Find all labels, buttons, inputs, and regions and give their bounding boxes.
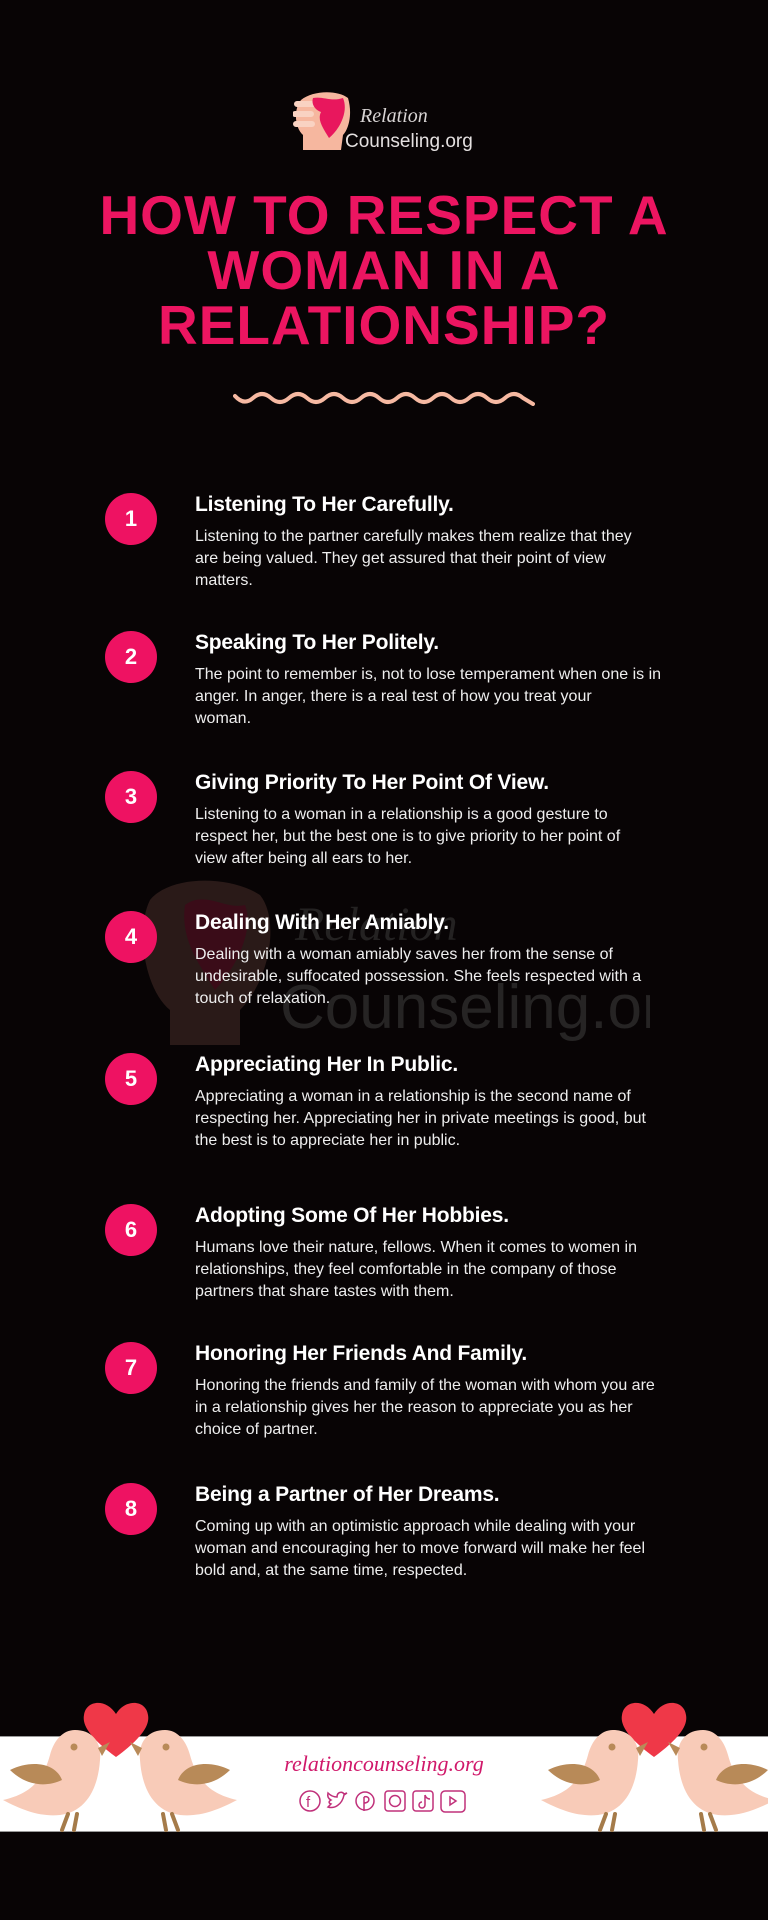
item 8: 8: [125, 1496, 137, 1521]
item 6: Humans love their nature, fellows. When it comes to women in: [195, 1239, 637, 1256]
logo: Relation: [359, 105, 428, 127]
item 8: [105, 1483, 645, 1579]
item 7: in a relationship gives her the reason to appreciate you as her: [195, 1399, 633, 1416]
item 2: Speaking To Her Politely.: [195, 631, 439, 654]
social icons: [299, 1790, 466, 1813]
item 4: [105, 911, 642, 1007]
item 3: 3: [125, 784, 137, 809]
watermark: faded logo: [145, 880, 650, 1045]
footer birds right: [541, 1702, 768, 1832]
item 5: Appreciating a woman in a relationship is the second name of: [195, 1088, 631, 1105]
item 7: Honoring the friends and family of the woman with whom you are: [195, 1377, 655, 1394]
item 8: Coming up with an optimistic approach while dealing with your: [195, 1518, 635, 1535]
item 3: [105, 771, 620, 867]
icon: fist with heart: [295, 92, 350, 150]
title: HOW TO RESPECT A: [99, 184, 669, 246]
title: [99, 184, 669, 356]
item 1: 1: [125, 506, 137, 531]
item 8: Being a Partner of Her Dreams.: [195, 1483, 499, 1506]
item 2: woman.: [195, 710, 251, 727]
item 7: [105, 1342, 655, 1438]
item 4: Dealing With Her Amiably.: [195, 911, 449, 934]
item 3: Listening to a woman in a relationship is a good gesture to: [195, 806, 608, 823]
item 1: matters.: [195, 572, 253, 589]
item 4: Dealing with a woman amiably saves her from the sense of: [195, 946, 613, 963]
item 5: [105, 1053, 646, 1149]
logo: Counseling.org: [345, 131, 473, 152]
item 3: Giving Priority To Her Point Of View.: [195, 771, 549, 794]
item 7: Honoring Her Friends And Family.: [195, 1342, 527, 1365]
footer url: relationcounseling.org: [284, 1751, 484, 1776]
item 1: Listening to the partner carefully makes them realize that they: [195, 528, 632, 545]
item 3: respect her, but the best one is to give priority to her point of: [195, 828, 620, 845]
item 6: 6: [125, 1217, 137, 1242]
item 4: 4: [125, 924, 137, 949]
footer birds left: [3, 1702, 237, 1832]
item 5: the best is to appreciate her in public.: [195, 1132, 460, 1149]
item 8: bold and, at the same time, respected.: [195, 1562, 467, 1579]
item 1: Listening To Her Carefully.: [195, 493, 454, 516]
squiggle divider: [233, 392, 535, 406]
item 4: undesirable, suffocated possession. She feels respected with a: [195, 968, 641, 985]
item 2: anger. In anger, there is a real test of how you treat your: [195, 688, 592, 705]
item 1: [105, 493, 632, 589]
item 8: woman and encouraging her to move forward will make her feel: [195, 1540, 645, 1557]
item 2: The point to remember is, not to lose temperament when one is in: [195, 666, 661, 683]
item 1: are being valued. They get assured that their point of view: [195, 550, 606, 567]
watermark: faded logo: Relation: [294, 898, 458, 951]
footer band: [0, 1736, 768, 1832]
item 7: 7: [125, 1355, 137, 1380]
item 5: respecting her. Appreciating her in private meetings is good, but: [195, 1110, 646, 1127]
social icons: f: [306, 1794, 311, 1811]
item 5: Appreciating Her In Public.: [195, 1053, 458, 1076]
title: WOMAN IN A: [207, 239, 561, 301]
item 5: 5: [125, 1066, 137, 1091]
item 6: Adopting Some Of Her Hobbies.: [195, 1204, 509, 1227]
item 7: choice of partner.: [195, 1421, 318, 1438]
title: RELATIONSHIP?: [158, 294, 610, 356]
item 6: partners that share tastes with them.: [195, 1283, 454, 1300]
item 4: touch of relaxation.: [195, 990, 330, 1007]
item 2: 2: [125, 644, 137, 669]
item 6: [105, 1204, 637, 1300]
logo: [293, 92, 473, 152]
item 6: relationships, they feel comfortable in the company of those: [195, 1261, 617, 1278]
item 3: view after being all ears to her.: [195, 850, 412, 867]
item 2: [105, 631, 661, 727]
